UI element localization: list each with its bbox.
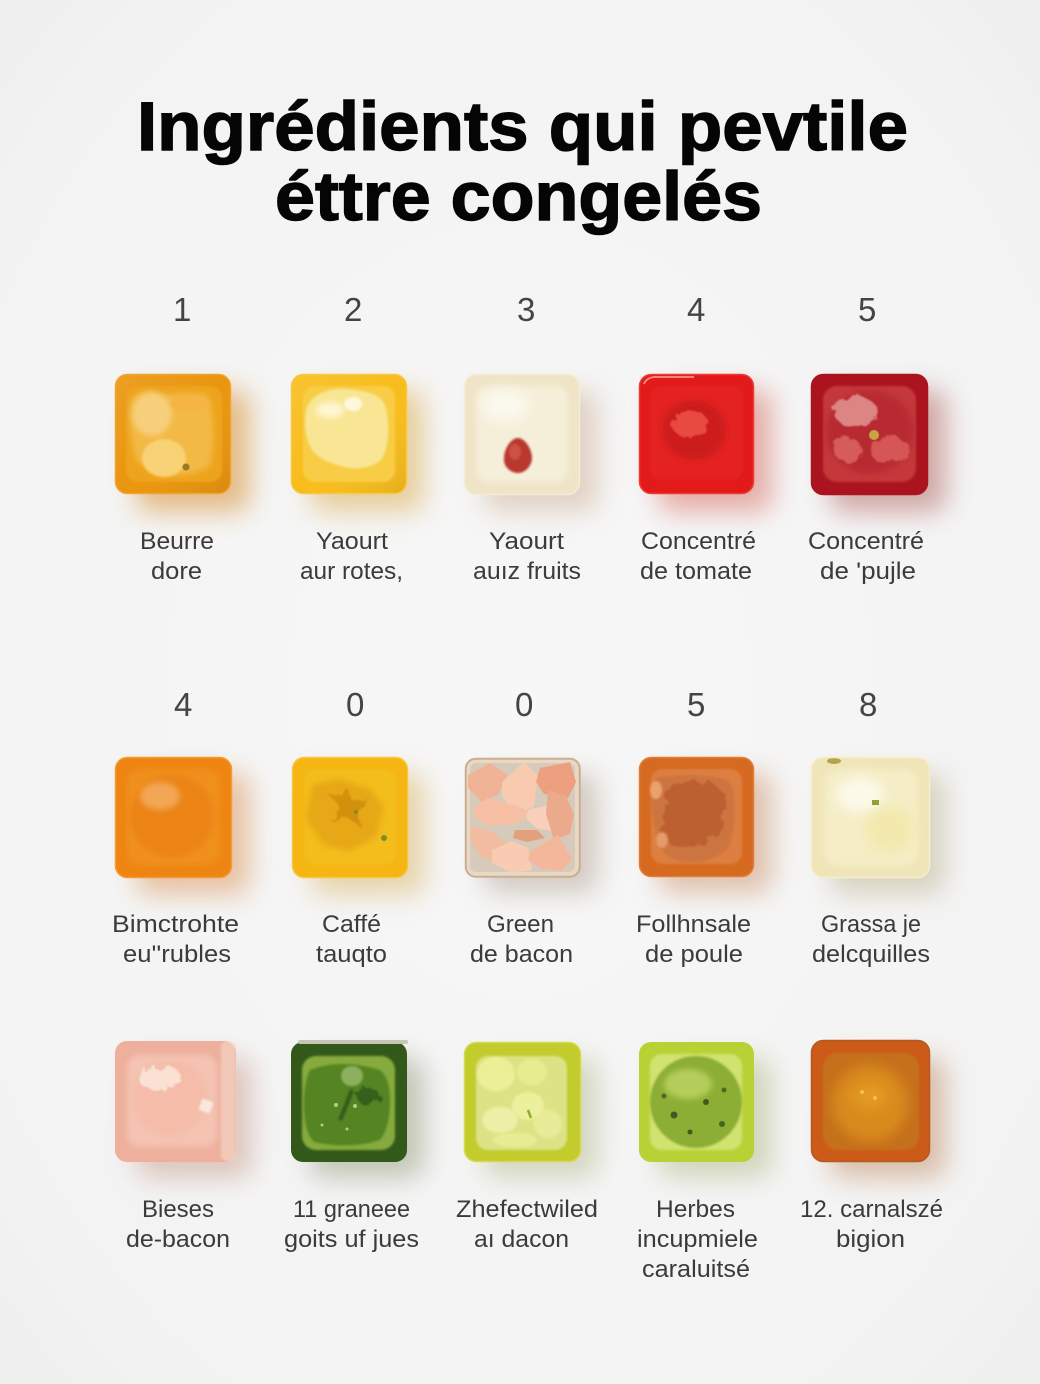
row 3 labels: Herbes [656,1196,735,1223]
row 2 numbers: 0 [515,686,533,723]
cube 9: fond de poule [639,757,772,893]
row 1 numbers [173,291,876,328]
row 3 labels: de-bacon [126,1226,230,1253]
row 1 labels: Concentré [808,528,924,555]
cube 7: café jaune [292,757,425,895]
row 2 labels: Follhnsale [636,911,751,938]
row 1 labels: Beurre [140,528,214,555]
row 2 labels: delcquilles [812,941,930,968]
row 2 labels: Green [487,911,554,938]
row 1 numbers: 2 [344,291,362,328]
cube 14: herbes [639,1042,772,1178]
row 2 labels: de poule [645,941,743,968]
row 2 labels: tauqto [316,941,387,968]
cube 1: beurre [115,374,250,512]
row 3 labels: bigion [836,1226,905,1253]
row 2 labels: Caffé [322,911,381,938]
row 2 labels: Grassa je [821,911,921,938]
cube 15: bouillon caramélisé [811,1040,946,1178]
row 1 labels: dore [151,558,202,585]
title: Ingrédients qui pevtile [137,88,908,165]
cube 13: courgette [464,1042,598,1178]
row 1 numbers: 1 [173,291,191,328]
row 3 labels: 12. carnalszé [800,1196,943,1223]
row 2 numbers [174,686,877,723]
row 3 labels [126,1196,943,1283]
title: éttre congelés [275,158,762,235]
row 1 labels: Yaourt [489,528,564,555]
row 1 labels: auız fruits [473,558,581,585]
row 2 numbers: 0 [346,686,364,723]
row 2 numbers: 8 [859,686,877,723]
row 2 numbers: 4 [174,686,192,723]
cube 4: concentré de tomate [639,374,772,512]
cube 12: pesto [291,1040,424,1178]
row 3 labels: incupmiele [637,1226,758,1253]
row 1 numbers: 5 [858,291,876,328]
row 2 labels: de bacon [470,941,573,968]
cube 6: bouillon orange [115,757,250,895]
row 1 labels: de 'pujle [820,558,916,585]
row 3 labels: 11 graneee [293,1196,410,1223]
row 1 numbers: 4 [687,291,705,328]
cube 3: yaourt aux fruits [464,374,598,512]
row 1 numbers: 3 [517,291,535,328]
row 2 labels: Bimctrohte [112,911,239,938]
cube 10: graisse de coquilles [811,757,946,895]
row 3 labels: Zhefectwiled [456,1196,598,1223]
row 3 labels: goits uf jues [284,1226,419,1253]
row 1 labels: Yaourt [316,528,388,555]
cube 2: yaourt [291,374,424,512]
row 1 labels: de tomate [640,558,752,585]
cube 5: concentré de pulpe [811,374,946,512]
row 1 labels: aur rotes, [300,558,403,585]
cube 8: lardons [465,758,598,893]
row 2 numbers: 5 [687,686,705,723]
row 2 labels: eu''rubles [123,941,231,968]
row 2 labels [112,911,930,968]
title [137,88,908,235]
cube 11: bières de bacon rose [115,1041,252,1178]
row 1 labels [140,528,924,585]
row 1 labels: Concentré [641,528,756,555]
row 3 labels: Bieses [142,1196,214,1223]
row 3 labels: caraluitsé [642,1256,750,1283]
row 3 labels: aı dacon [474,1226,569,1253]
